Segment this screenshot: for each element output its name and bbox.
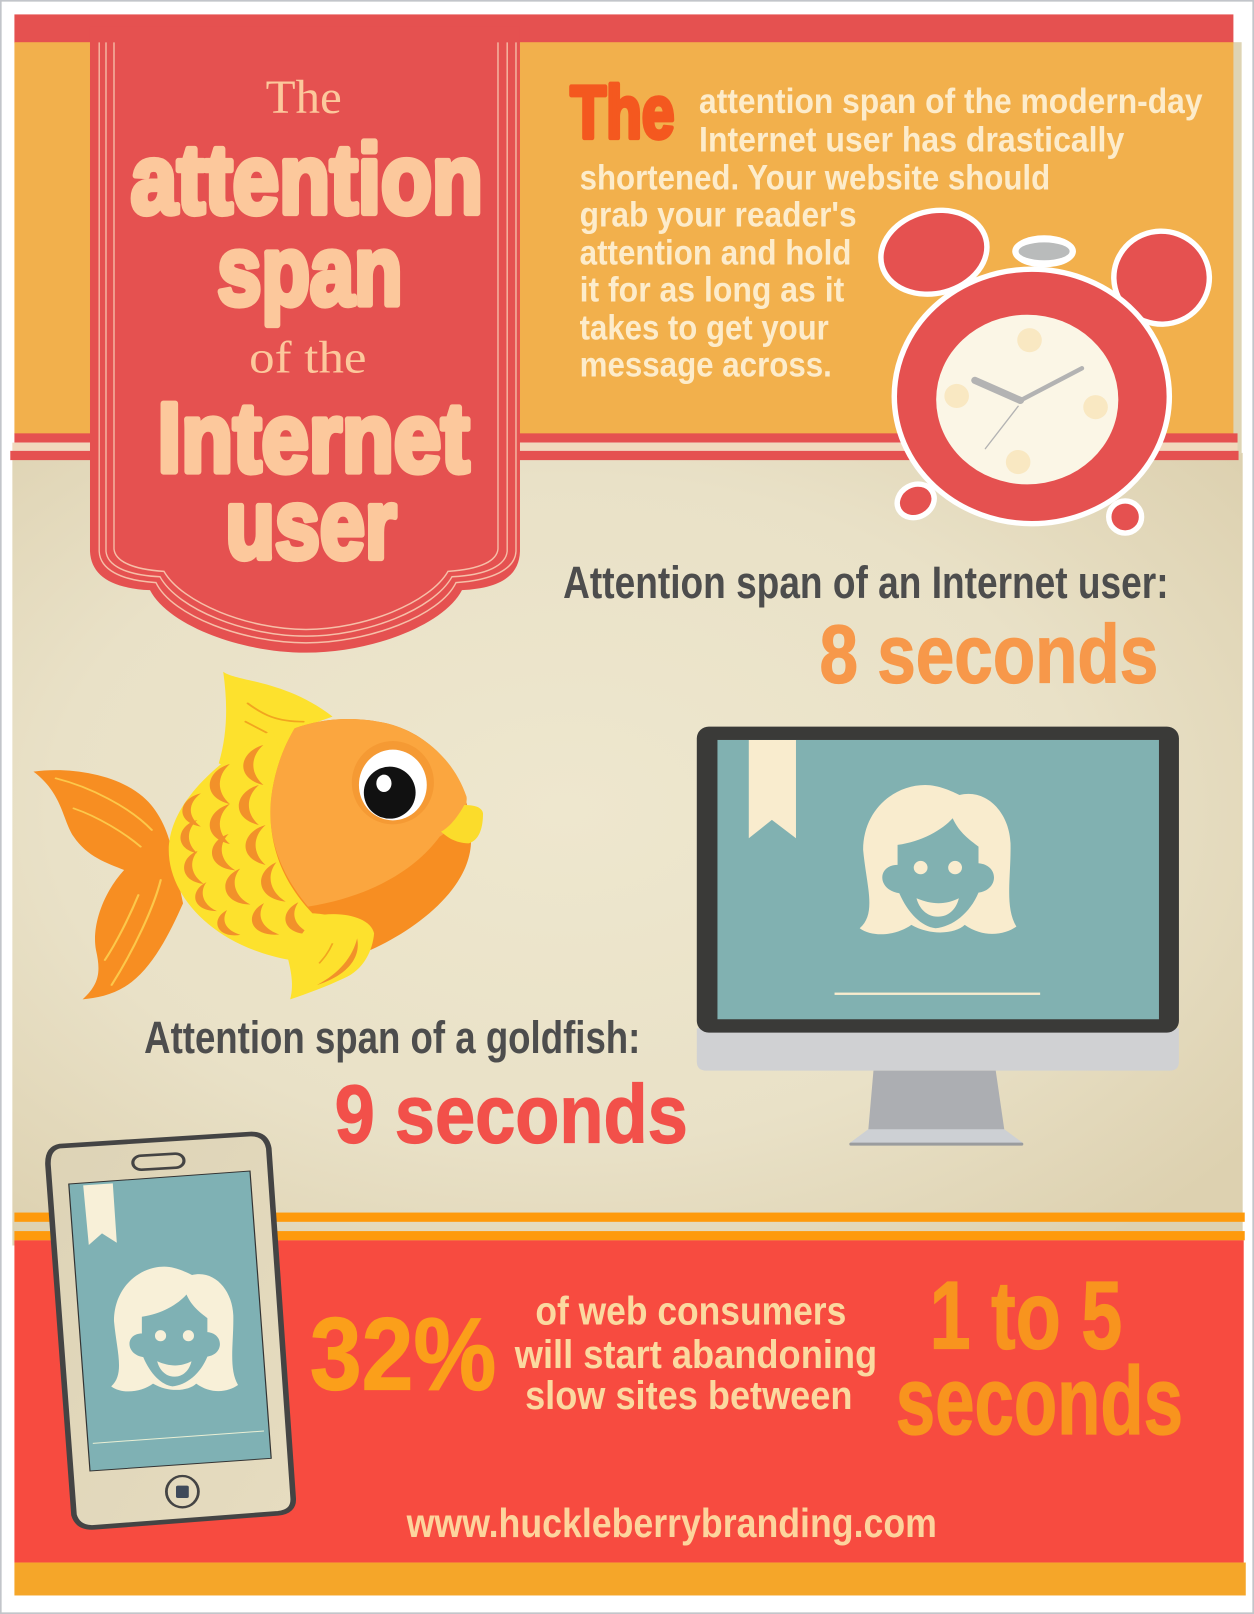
title text: Internet [158, 382, 469, 492]
text: web consumers abandoning: will start abandoning [514, 1332, 877, 1377]
stat: 1 to 5 seconds: 1 to 5 [930, 1260, 1122, 1369]
intro paragraph [580, 82, 1203, 385]
panel: footer band [14, 1213, 1246, 1595]
intro paragraph: shortened. Your website should [580, 158, 1050, 197]
intro paragraph: grab your reader's [580, 195, 857, 234]
text: web consumers abandoning: slow sites between [525, 1373, 852, 1418]
panel: title banner [90, 27, 520, 653]
text: web consumers abandoning [514, 1289, 877, 1418]
stat: 8 seconds: 8 seconds [820, 608, 1158, 700]
label: goldfish attention span: Attention span of a goldfish: [144, 1012, 640, 1063]
footer url: www.huckleberrybranding.com [406, 1500, 937, 1546]
background paper panel [12, 453, 1243, 1245]
icon: desktop monitor [697, 727, 1179, 1146]
intro drop cap: The [570, 71, 674, 154]
intro paragraph: Internet user has drastically [699, 120, 1125, 159]
title text: user [225, 469, 396, 579]
title text: of the [249, 333, 367, 383]
icon: alarm clock [871, 199, 1223, 533]
icon: smartphone [48, 1134, 293, 1527]
title text: span [217, 216, 403, 326]
stat: 1 to 5 seconds [896, 1260, 1183, 1455]
text: web consumers abandoning: of web consumers [535, 1289, 846, 1334]
intro paragraph: attention and hold [580, 234, 851, 273]
stat: 32 percent: 32% [310, 1297, 496, 1412]
title text: attention [131, 124, 483, 234]
stat: 9 seconds: 9 seconds [335, 1069, 688, 1161]
intro paragraph: it for as long as it [580, 271, 845, 310]
title text [131, 72, 483, 579]
title text: The [266, 72, 342, 124]
intro paragraph: attention span of the modern-day [699, 82, 1203, 121]
header band [10, 14, 1239, 460]
intro paragraph: message across. [580, 346, 832, 385]
intro paragraph: takes to get your [580, 309, 829, 348]
icon: goldfish [33, 672, 483, 999]
